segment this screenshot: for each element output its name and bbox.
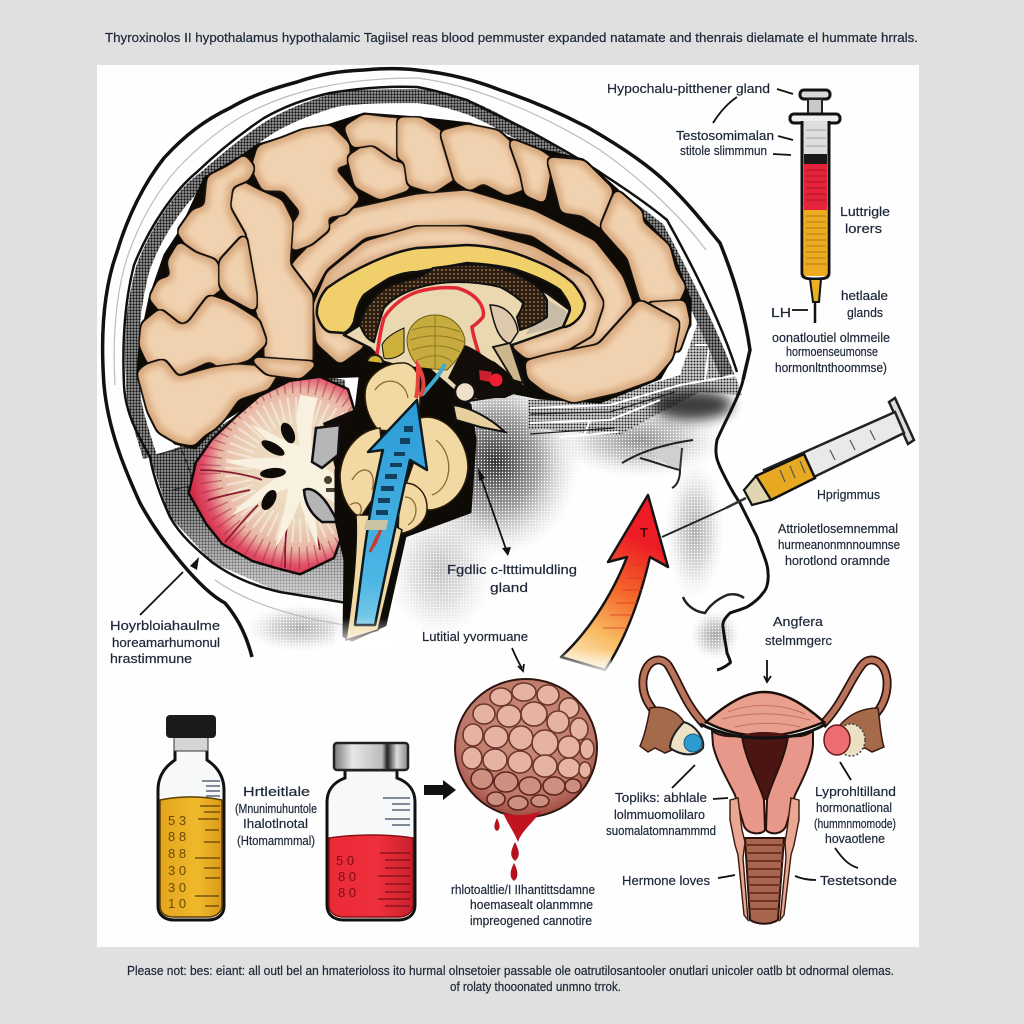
graduation ticks xyxy=(806,130,826,264)
label: yellow vial: Hrtleitlale xyxy=(243,784,310,799)
top lobe xyxy=(365,363,420,432)
red gradient arrow xyxy=(555,495,668,675)
head cross-section xyxy=(103,68,768,670)
glass scale xyxy=(202,781,220,796)
needle xyxy=(814,302,816,323)
vial numerals: 1 0 xyxy=(168,896,186,911)
thalamus xyxy=(407,315,465,370)
labels: syringe xyxy=(607,81,890,375)
vial numerals: 8 8 xyxy=(168,846,186,861)
labels: syringe: glands xyxy=(847,305,883,320)
cerebellum xyxy=(188,378,355,576)
arrowhead xyxy=(190,557,199,570)
vertical syringe xyxy=(790,90,840,323)
labels: uterus left xyxy=(606,790,716,888)
folia stripes xyxy=(210,382,386,558)
footer note xyxy=(127,963,894,994)
fallopian tube fill xyxy=(643,660,887,725)
vial numerals xyxy=(168,813,186,911)
posterior gyri xyxy=(140,158,313,443)
labels: syringe: hormoenseumonse xyxy=(786,344,878,359)
label: fsh gland xyxy=(447,562,577,595)
label: yellow vial: Ihalotlnotal xyxy=(243,816,308,831)
glass body xyxy=(327,770,415,920)
upper gyri xyxy=(254,117,683,300)
region behind cerebellum xyxy=(150,372,352,603)
left fimbria xyxy=(640,707,684,753)
labels: hypothalamus: horotlond oramnde xyxy=(785,553,890,568)
right fimbria xyxy=(840,708,884,752)
arrow: hypothalamic hormone pointer xyxy=(140,572,183,615)
fluid xyxy=(756,454,815,500)
barrel xyxy=(764,412,904,497)
septal wedge xyxy=(490,305,518,344)
right lobe xyxy=(404,417,468,510)
label: tumor: hoemasealt olanmmne xyxy=(470,897,593,912)
region lower fade xyxy=(150,372,352,603)
label: tumor xyxy=(451,882,595,928)
needle xyxy=(726,498,746,508)
footer note: of rolaty thooonated unmno trrok. xyxy=(450,979,621,994)
dark grid under brain xyxy=(155,445,195,490)
fallopian tube outlines xyxy=(643,660,887,725)
nozzle xyxy=(810,279,821,302)
blue follicle xyxy=(684,734,702,752)
vaginal canal xyxy=(745,838,784,924)
dark surround xyxy=(336,362,475,640)
vial numerals: 8 8 xyxy=(168,829,186,844)
fluid xyxy=(160,797,222,917)
plunger head xyxy=(800,90,830,99)
label: angiotensin: stelmmgerc xyxy=(765,633,832,648)
vial: yellow xyxy=(158,715,224,920)
red artery xyxy=(377,288,484,357)
skull fine lines xyxy=(114,78,706,625)
labels: uterus left: Hermone loves xyxy=(622,873,710,888)
glass body xyxy=(158,750,224,920)
arrow: to fsh label xyxy=(479,472,507,552)
pons nodule xyxy=(453,382,505,432)
red streak xyxy=(370,527,382,552)
skull outer line xyxy=(103,68,750,657)
pointer lines xyxy=(512,89,858,880)
labels: syringe: Hypochalu-pitthener gland xyxy=(607,81,770,96)
cavity xyxy=(738,732,792,800)
labels: syringe: hetlaale xyxy=(841,288,888,303)
lobe curls xyxy=(350,381,449,525)
vial numerals: 5 3 xyxy=(168,813,186,828)
labels: uterus left: lolmmuomolilaro xyxy=(614,807,705,822)
label: yellow vial: (Mnunimuhuntole xyxy=(235,801,317,816)
lobes xyxy=(190,378,353,573)
label: hypothalamic hormone xyxy=(110,618,220,666)
labels: uterus right: (hummnmomode) xyxy=(814,816,896,831)
arbor vitae xyxy=(225,395,343,548)
black band xyxy=(804,154,827,164)
footer note: Please not: bes: eiant: all outl bel an hmaterioloss ito hurmal olnsetoier passable ole oatrutilosantooler onutlari unicoler oatlb bt odnormal olemas. xyxy=(127,963,894,978)
labels: uterus right xyxy=(814,784,897,888)
vial numerals: 8 0 xyxy=(338,885,356,900)
vial numerals xyxy=(336,853,356,900)
label: hypothalamic hormone: hrastimmune xyxy=(110,651,192,666)
labels: syringe: stitole slimmmun xyxy=(680,143,767,158)
panel: main illustration xyxy=(97,65,919,947)
corpus callosum xyxy=(317,245,585,333)
vial scale xyxy=(195,806,220,906)
hatched band xyxy=(360,265,547,342)
mass xyxy=(455,679,597,817)
red fluid xyxy=(804,164,827,210)
right wall xyxy=(766,731,813,833)
label: tumor: rhlotoaltlie/I IIhantittsdamne xyxy=(451,882,595,897)
pituitary wedge xyxy=(493,343,523,383)
label: fsh gland: Fgdlic c-ltttimuldling xyxy=(447,562,577,577)
red fissures xyxy=(200,470,320,568)
black arrow xyxy=(424,780,456,800)
skull inner line xyxy=(123,87,737,603)
labels: syringe: Luttrigle xyxy=(840,204,890,219)
labels: syringe: Testosomimalan xyxy=(676,128,774,143)
barrel ticks xyxy=(780,430,875,482)
metal cap xyxy=(334,743,408,770)
uterus anatomy xyxy=(640,660,887,924)
stippled facial shading xyxy=(230,367,750,670)
tumor gland xyxy=(455,679,597,881)
labels: uterus right: Testetsonde xyxy=(820,873,897,888)
arbor nuclei xyxy=(324,476,335,492)
labels: uterus right: Lyprohltilland xyxy=(815,784,896,799)
vial numerals: 3 0 xyxy=(168,863,186,878)
labels: syringe: oonatloutiel olmmeile xyxy=(772,330,890,345)
fundus striations xyxy=(722,705,810,727)
neck xyxy=(174,737,208,751)
bottom fade of spinal cord xyxy=(335,618,395,650)
grey septum xyxy=(525,300,568,335)
inner arc gyrus xyxy=(316,229,601,361)
fluid xyxy=(329,835,413,917)
barrel glass xyxy=(802,121,829,206)
pink follicle xyxy=(824,725,850,755)
left ovary xyxy=(670,722,703,754)
interior diencephalon xyxy=(344,268,570,402)
label: hypothalamic hormone: horeamarhumonul xyxy=(112,635,220,650)
colored tract above arrow xyxy=(416,364,445,398)
labels: uterus right: hormonatlional xyxy=(816,800,892,815)
arrow stripes xyxy=(603,565,648,628)
grey pockets xyxy=(304,425,340,522)
label: luteal hormone: Lutitial yvormuane xyxy=(422,629,528,644)
vial numerals: 3 0 xyxy=(168,880,186,895)
frontal lower gyri xyxy=(528,303,687,400)
lower darker nodules xyxy=(471,769,581,810)
label: angiotensin: Angfera xyxy=(773,614,824,629)
labels: uterus left: suomalatomnammmd xyxy=(606,823,716,838)
labels: hypothalamus: hurmeanonmnnoumnse xyxy=(778,537,900,552)
pointer line from arrow to needle xyxy=(662,508,726,537)
blood drops xyxy=(494,818,519,881)
face profile xyxy=(716,380,768,670)
labels: hypothalamus: Attrioletlosemnemmal xyxy=(778,521,898,536)
arrow letter: T xyxy=(640,525,648,540)
left wall xyxy=(712,731,765,833)
skull ring xyxy=(132,96,727,457)
vial numerals: 5 0 xyxy=(336,853,354,868)
small lobe xyxy=(382,328,404,359)
vial scale xyxy=(378,853,410,906)
flange xyxy=(790,114,840,123)
label: fsh gland: gland xyxy=(490,580,528,595)
hub xyxy=(744,476,771,505)
nostril xyxy=(683,594,744,613)
band across top xyxy=(700,724,826,738)
arbor cavities xyxy=(258,420,298,513)
pineal node xyxy=(367,355,383,371)
red nuclei xyxy=(479,370,502,386)
title: Thyroxinolos II hypothalamus hypothalamic Tagiisel reas blood pemmuster expanded natamate and thenrais dielamate el hummate hrrals. xyxy=(105,30,918,45)
left side tissue xyxy=(730,798,748,920)
brain xyxy=(138,114,690,448)
labels: syringe: lorers xyxy=(845,221,883,236)
brain silhouette xyxy=(138,114,690,448)
midbrain black region xyxy=(448,345,527,398)
vial: red xyxy=(327,743,415,920)
label: tumor: impreogened cannotire xyxy=(470,913,592,928)
brainstem xyxy=(336,362,475,640)
dark backing xyxy=(190,378,353,573)
labels: syringe: hormonltnthoommse) xyxy=(775,360,887,375)
canal ribs xyxy=(745,845,784,909)
right side tissue xyxy=(780,798,799,920)
label: angiotensin xyxy=(765,614,832,648)
outer arc gyrus xyxy=(287,193,630,362)
scale plate xyxy=(364,520,388,530)
labels: hypothalamus xyxy=(778,487,900,568)
plunger rod xyxy=(808,99,822,117)
arrow bottom fade xyxy=(555,650,612,675)
labels: uterus right: hovaotlene xyxy=(825,831,885,846)
blue arrow xyxy=(355,400,427,625)
label: hypothalamic hormone: Hoyrbloiahaulme xyxy=(110,618,220,633)
fundus xyxy=(706,692,824,736)
diagonal syringe xyxy=(726,398,914,508)
spinal cord rails xyxy=(346,515,402,640)
skull base lines xyxy=(530,317,738,437)
label: yellow vial xyxy=(235,784,317,848)
glass scale xyxy=(383,798,410,825)
skull base band xyxy=(528,315,742,436)
nodules xyxy=(462,683,594,778)
bleed xyxy=(503,811,541,842)
yellow fluid xyxy=(804,210,827,276)
left lobe xyxy=(340,428,382,518)
labels: hypothalamus: Hprigmmus xyxy=(817,487,880,502)
barrel outline xyxy=(802,121,829,279)
flange xyxy=(889,398,914,444)
label: yellow vial: (Htomammmal) xyxy=(237,833,315,848)
lower lobe xyxy=(398,483,427,534)
vial numerals: 8 0 xyxy=(338,869,356,884)
dark eyebrow xyxy=(652,390,732,420)
right ovary xyxy=(837,724,865,756)
eye xyxy=(622,440,693,488)
labels: syringe: LH xyxy=(771,305,791,320)
black cap xyxy=(166,715,216,738)
arrowheads xyxy=(478,468,511,556)
arrow scale xyxy=(376,426,413,515)
labels: uterus left: Topliks: abhlale xyxy=(615,790,707,805)
